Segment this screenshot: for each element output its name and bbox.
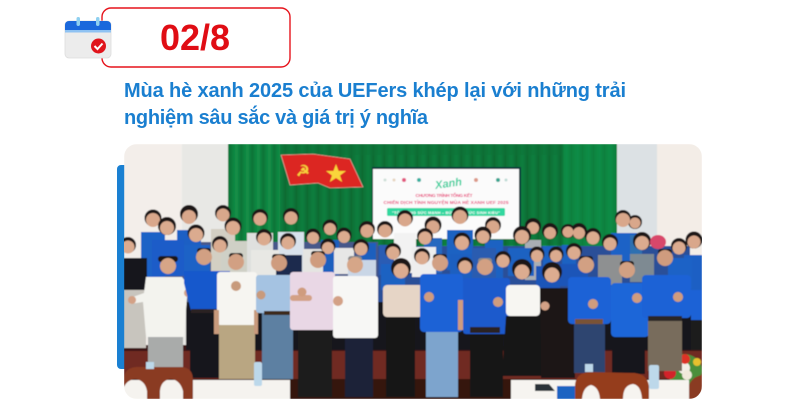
rear row faces <box>146 208 700 248</box>
table and chair right <box>511 364 702 399</box>
back rows of people <box>120 205 702 348</box>
person 9 <box>463 258 510 397</box>
person 7 <box>383 258 423 397</box>
middle row hair <box>120 217 687 273</box>
middle row torsos <box>124 240 692 348</box>
counter number: 02/8 <box>160 17 230 58</box>
rear row torsos <box>140 228 702 291</box>
photo: group of volunteers <box>120 144 702 399</box>
flags: ☭ <box>296 163 310 180</box>
title: nghiệm sâu sắc và giá trị ý nghĩa <box>124 105 429 129</box>
flower bouquet <box>664 354 702 386</box>
green curtain <box>227 144 618 247</box>
person 10 <box>502 259 544 376</box>
person 15 <box>691 290 702 350</box>
walls <box>124 144 702 346</box>
screen logo: Xanh <box>433 176 463 192</box>
person 4 <box>256 254 294 379</box>
crowd backing <box>148 242 690 302</box>
event screen: "TỎA SÁNG SỨC MẠNH – BỨT PHÁ SỨC SINH KIỀU" <box>392 210 500 215</box>
person 5 <box>290 251 335 397</box>
accent bar <box>117 165 129 369</box>
person 11 <box>540 262 575 378</box>
table and chair left <box>124 362 290 399</box>
person 14 <box>642 249 691 371</box>
screen logos <box>384 178 508 182</box>
front row people <box>128 248 702 397</box>
icon: calendar with check <box>65 17 111 58</box>
person 12 <box>568 256 611 373</box>
flags <box>281 154 363 188</box>
person 3 <box>214 253 258 379</box>
person 6 <box>333 256 378 397</box>
screen text: CHƯƠNG TRÌNH TỔNG KẾT <box>416 191 473 198</box>
event screen: CHIẾN DỊCH TÌNH NGUYỆN MÙA HÈ XANH UEF 2025 <box>384 198 509 206</box>
middle row faces <box>122 221 686 274</box>
title: Mùa hè xanh 2025 của UEFers khép lại với những trải <box>124 80 626 102</box>
screen slogan strip <box>387 208 505 216</box>
event screen <box>372 167 521 239</box>
bouquet behind rear row <box>650 235 666 249</box>
dark legs behind front row <box>186 300 696 350</box>
person 2 <box>184 248 230 378</box>
person 8 <box>420 254 463 397</box>
stage floor <box>124 345 702 399</box>
title <box>124 80 626 129</box>
person 13 <box>611 261 649 374</box>
badge: red outlined counter <box>102 8 290 67</box>
rear row hair <box>144 205 702 248</box>
person 1 <box>128 256 192 370</box>
